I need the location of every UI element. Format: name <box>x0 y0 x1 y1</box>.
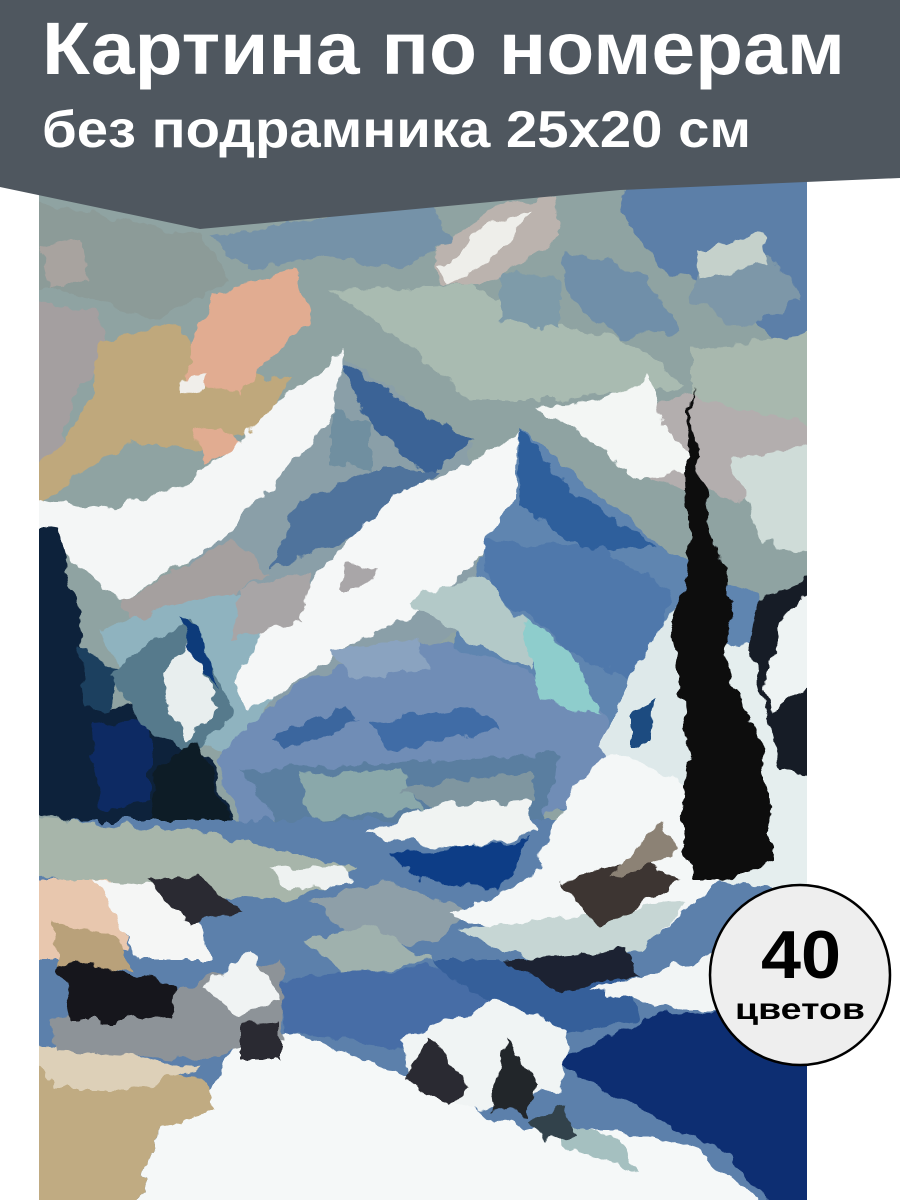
title line 2: без подрамника 25х20 см <box>42 101 751 159</box>
right snowy bank <box>450 640 830 1010</box>
right deep blue river <box>562 1010 807 1200</box>
badge caption: цветов <box>735 993 865 1026</box>
top banner <box>0 0 900 229</box>
far mountains <box>39 348 760 824</box>
badge number: 40 <box>761 917 841 993</box>
snowy fir tree on the right edge <box>748 575 807 776</box>
sky background <box>39 182 807 824</box>
left foreground bushes <box>20 875 285 1060</box>
large dark fir tree <box>670 390 775 880</box>
snowy foreground <box>20 1030 780 1200</box>
valley and lake <box>20 770 830 1200</box>
badge: 40 colours <box>710 885 890 1065</box>
title line 1: Картина по номерам <box>42 7 845 90</box>
left dark forest <box>20 525 232 825</box>
painting: winter mountain landscape <box>20 160 830 1200</box>
foreground trees on snow <box>400 1000 575 1140</box>
